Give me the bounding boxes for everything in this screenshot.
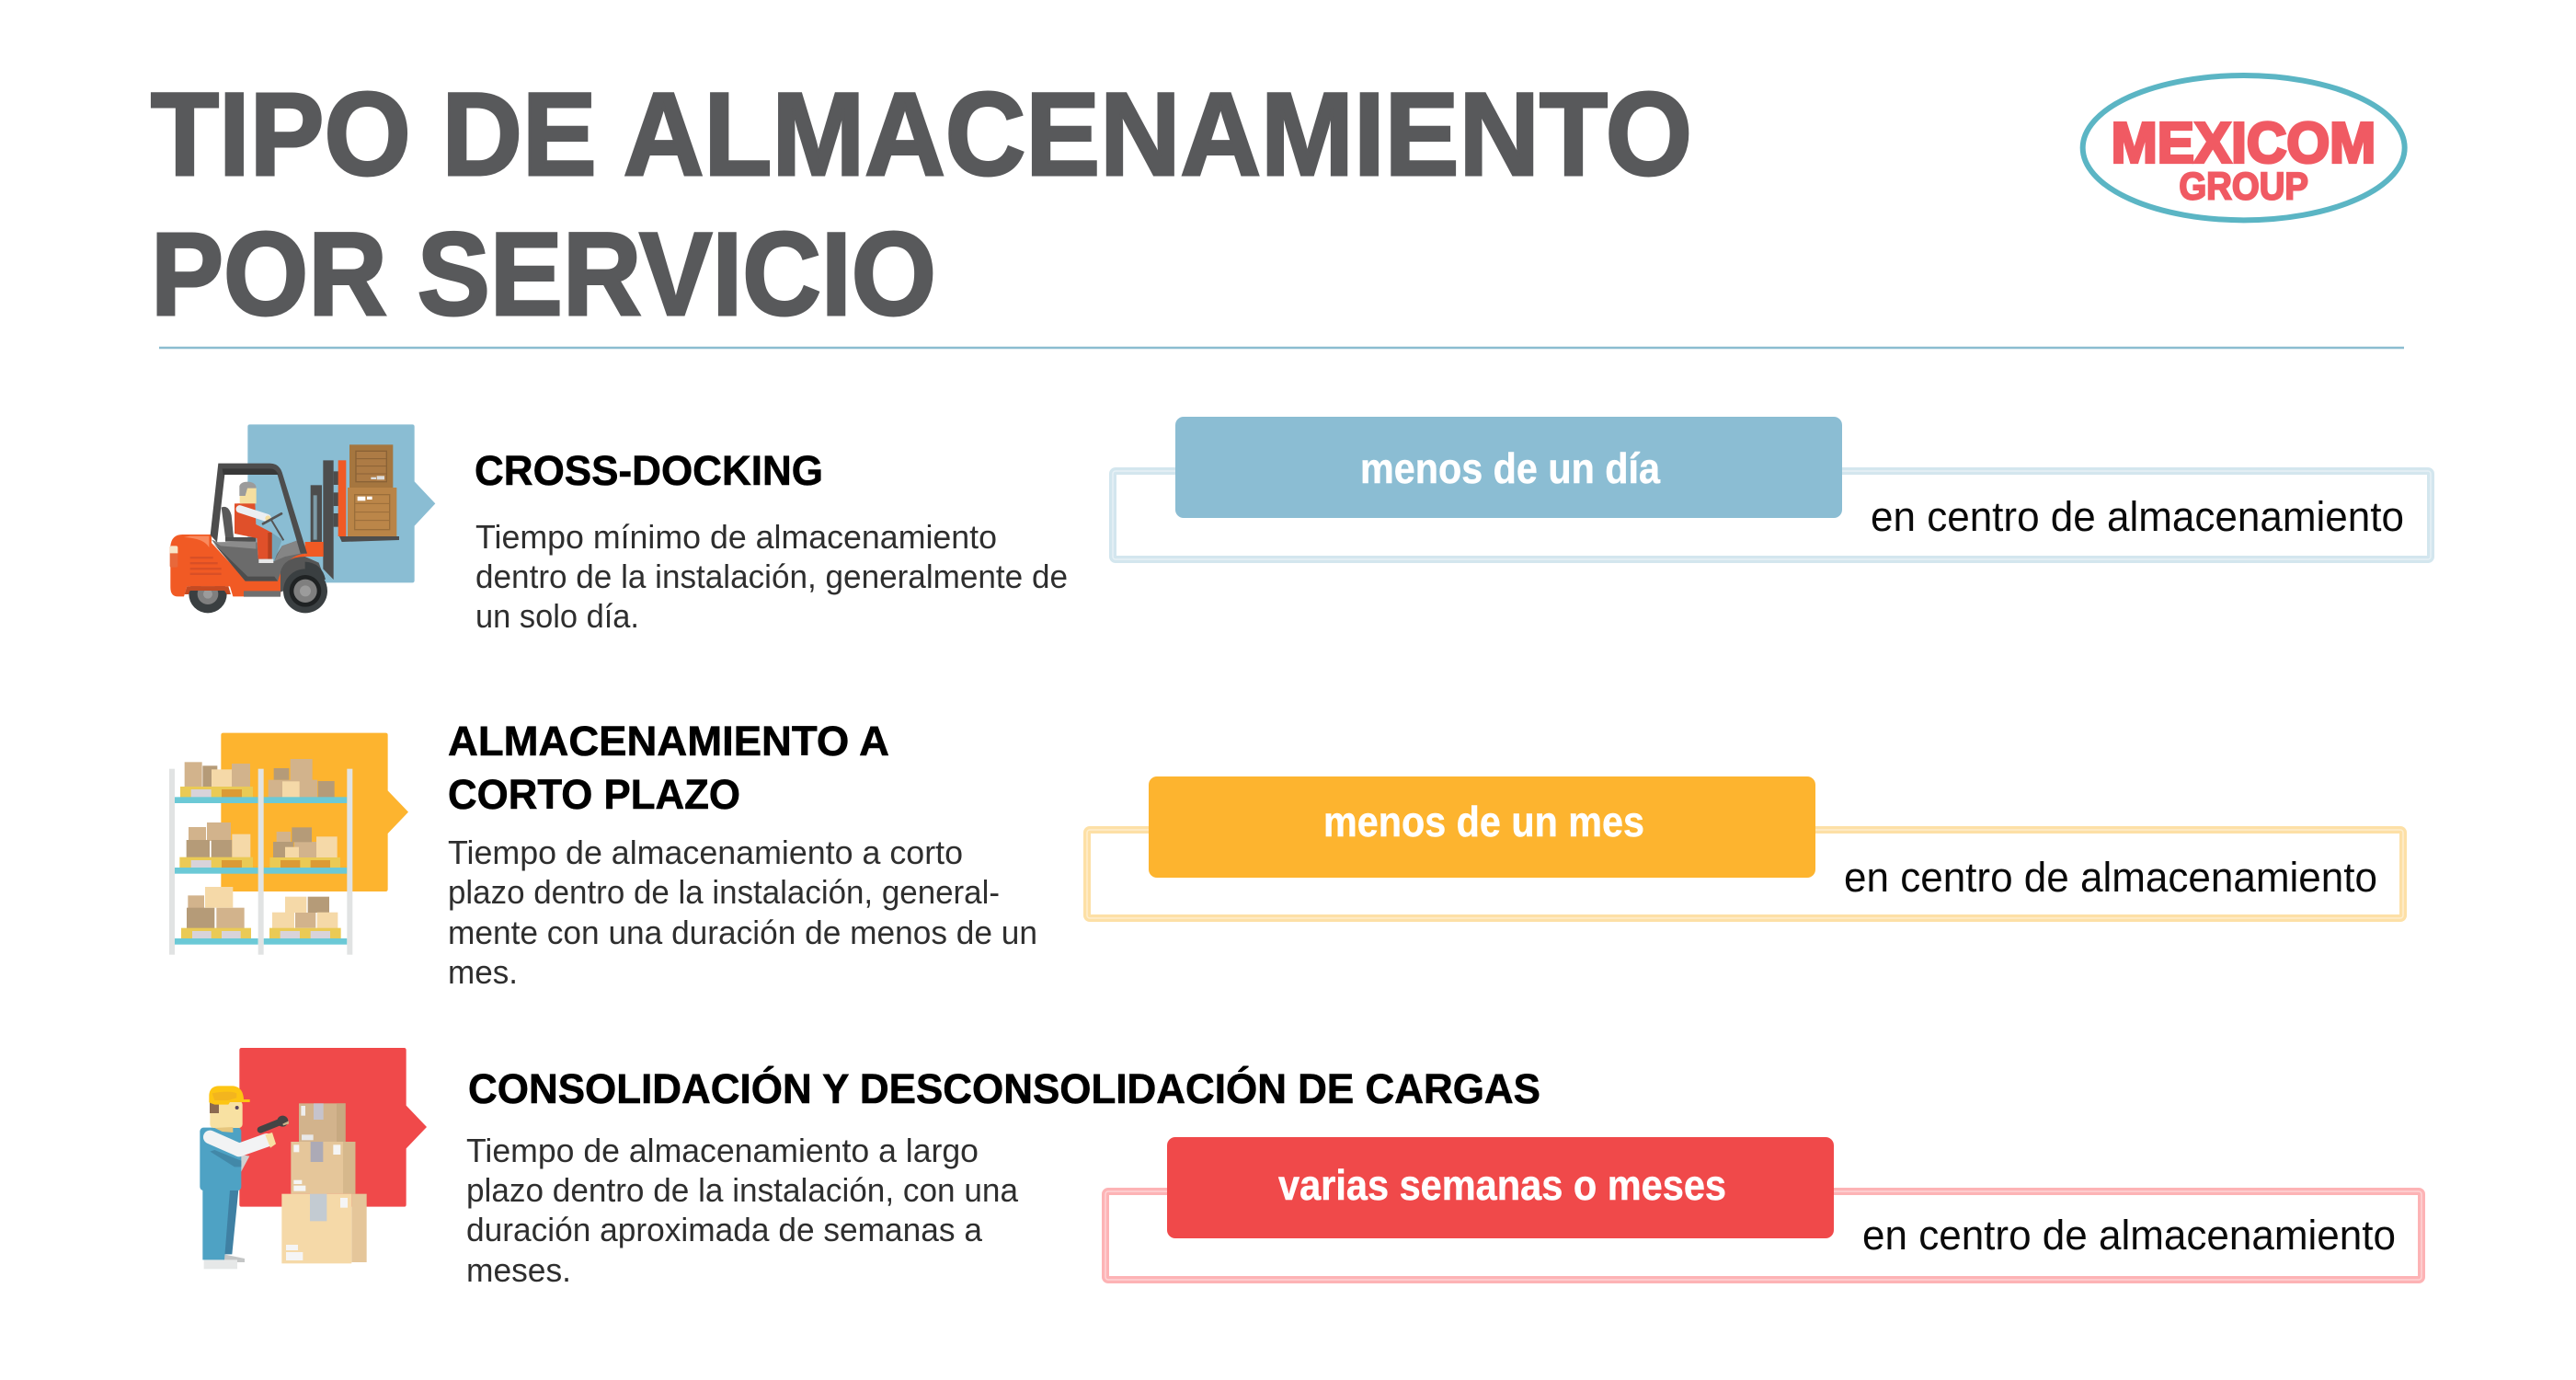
text block: cross-docking description: dentro de la instalación, generalmente de [475,558,1068,595]
title: TIPO DE ALMACENAMIENTO [151,69,1692,201]
text block: short-term description: plazo dentro de la instalación, general- [448,873,1000,911]
duration bar: menos de un día [1113,417,2431,559]
text block: cross-docking description: un solo día. [475,597,639,635]
text block: consolidation description: Tiempo de almacenamiento a largo [466,1132,979,1169]
duration bar: menos de un mes: menos de un mes [1323,798,1644,845]
icon: warehouse shelves on orange panel [169,733,408,955]
duration bar: menos de un mes: en centro de almacenamiento [1844,854,2377,901]
logo: Mexicom Group [2083,75,2405,220]
duration bar: menos de un día: en centro de almacenamiento [1871,493,2404,540]
duration bar: varias semanas o meses: varias semanas o meses [1278,1161,1726,1209]
text block: cross-docking description: Tiempo mínimo de almacenamiento [475,518,997,556]
icon: worker scanning boxes on red panel [200,1048,427,1269]
row 3: consolidation [200,1048,2421,1289]
duration bar: varias semanas o meses [1105,1137,2421,1280]
heading: almacenamiento a corto plazo [448,718,889,818]
heading: consolidación y desconsolidación de cargas: CONSOLIDACIÓN Y DESCONSOLIDACIÓN DE CARGAS [468,1065,1540,1112]
text block: consolidation description [466,1132,1019,1289]
heading: almacenamiento a corto plazo: ALMACENAMIENTO A [448,718,889,765]
title: POR SERVICIO [151,209,936,340]
text block: short-term description [448,834,1037,991]
heading: cross-docking: CROSS-DOCKING [475,447,823,494]
logo: Mexicom Group: MEXICOM [2112,112,2376,176]
row 2: short-term storage [169,718,2403,991]
text block: consolidation description: meses. [466,1251,571,1289]
text block: cross-docking description [475,518,1068,635]
duration bar: varias semanas o meses: en centro de almacenamiento [1862,1212,2396,1259]
icon: forklift on blue panel [170,424,435,613]
row 1: cross-docking [170,417,2431,635]
heading: almacenamiento a corto plazo: CORTO PLAZO [448,771,740,818]
duration bar: menos de un día: menos de un día [1360,444,1660,492]
text block: consolidation description: plazo dentro de la instalación, con una [466,1171,1019,1209]
duration bar: menos de un mes [1087,776,2403,918]
text block: short-term description: mente con una duración de menos de un [448,914,1037,951]
text block: consolidation description: duración aproximada de semanas a [466,1211,983,1248]
logo: Mexicom Group: GROUP [2179,166,2308,208]
title [151,69,1692,340]
text block: short-term description: mes. [448,953,518,991]
text block: short-term description: Tiempo de almacenamiento a corto [448,834,963,871]
